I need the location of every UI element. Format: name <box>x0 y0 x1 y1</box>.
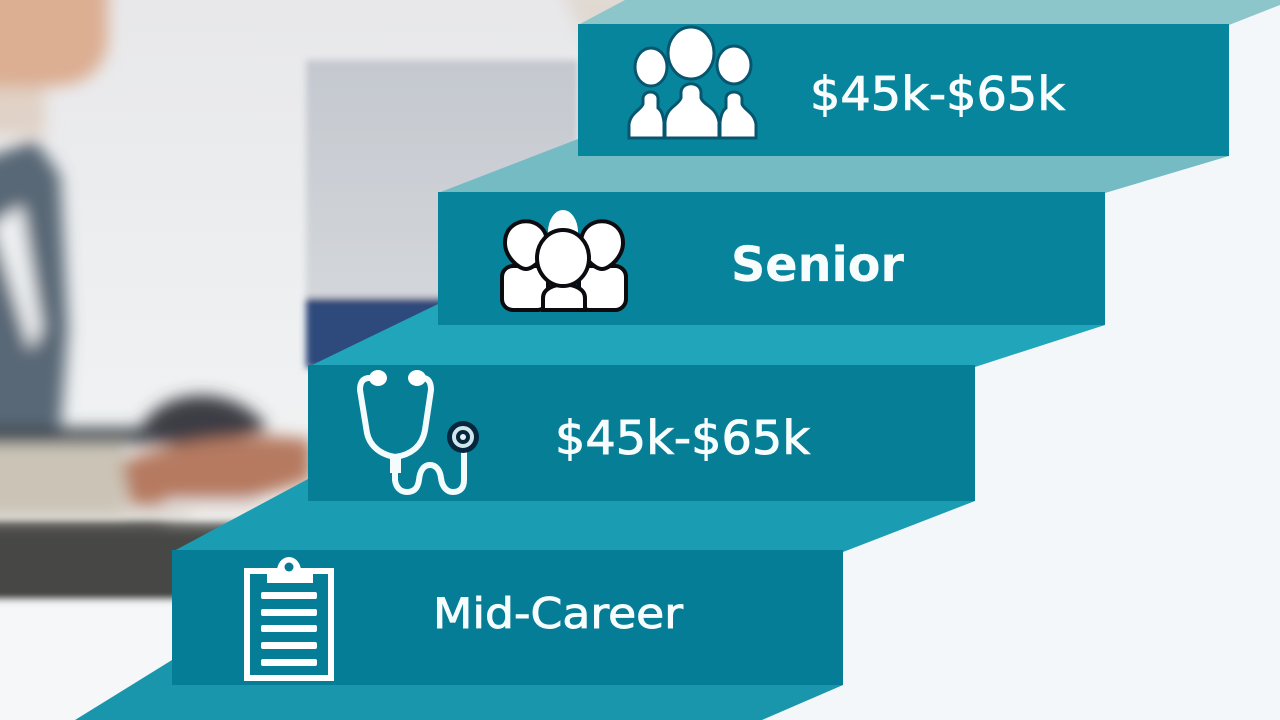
step 3: senior <box>438 192 1105 325</box>
step 2 tread <box>308 304 1105 367</box>
step 4 tread <box>578 0 1280 25</box>
level label: Mid-Career <box>433 589 684 638</box>
step 1 tread <box>172 479 975 552</box>
level label: Senior <box>731 237 904 293</box>
step 2: salary <box>308 365 975 501</box>
step 1: mid-career <box>172 550 843 685</box>
step 4: salary <box>578 24 1229 156</box>
base tread <box>75 660 843 720</box>
salary label: $45k-$65k <box>555 411 810 465</box>
salary label: $45k-$65k <box>810 67 1065 121</box>
step 3 tread <box>438 139 1229 193</box>
icon: team of people <box>502 210 626 310</box>
blurred photo: person at a computer <box>0 0 640 720</box>
icon: clipboard <box>247 557 331 678</box>
icon: group of three people <box>629 27 756 138</box>
icon: stethoscope <box>360 370 479 492</box>
